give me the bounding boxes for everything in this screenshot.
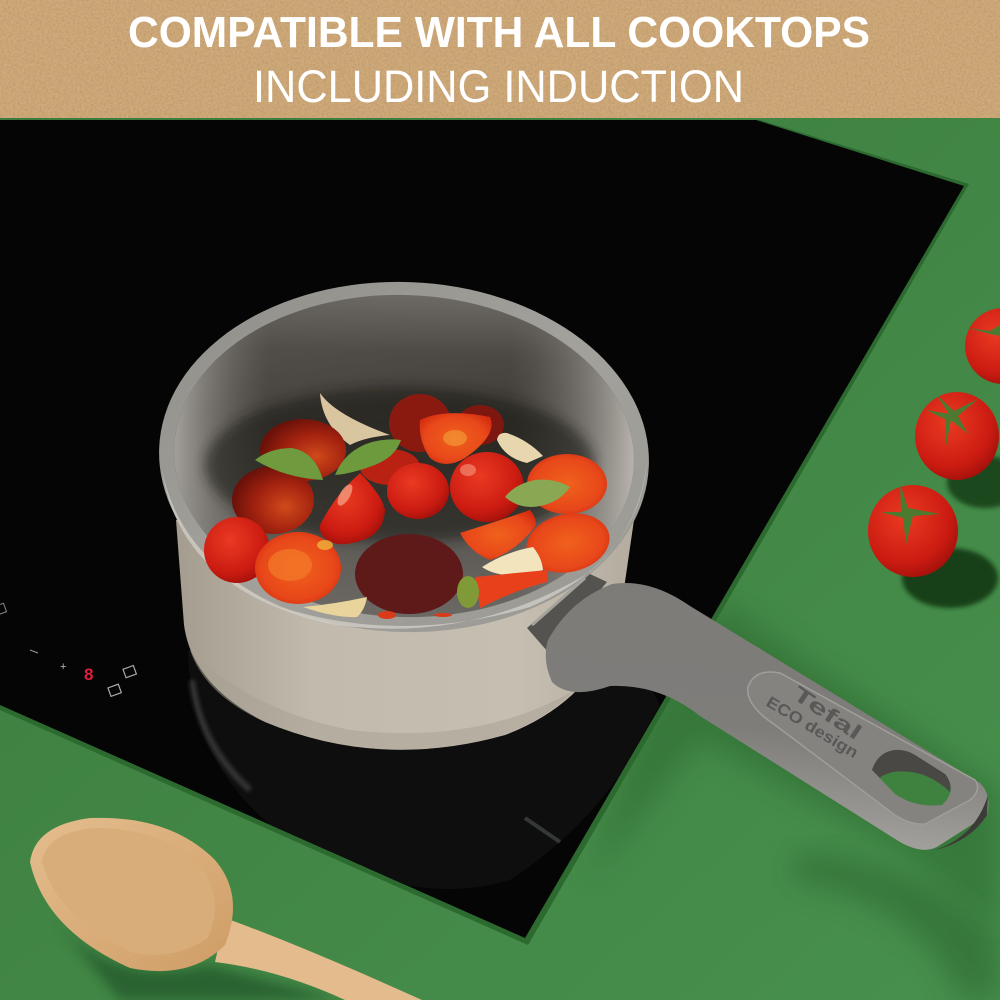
cooktop touch controls [0,603,136,696]
tomato shadows [902,548,998,608]
kraft paper banner [0,0,1000,118]
banner subheading: INCLUDING INDUCTION [253,61,744,112]
spoon bowl [30,818,233,971]
pan handle [527,574,988,851]
banner heading: COMPATIBLE WITH ALL COOKTOPS [128,8,870,57]
highlights [335,482,355,508]
induction cooktop [0,120,969,945]
wooden spoon [30,818,422,1000]
tomato middle [915,392,999,480]
handle grip [546,583,988,850]
handle hanging hole [872,750,951,806]
tomato bottom [868,485,958,577]
cooktop touch controls: 8 [84,665,93,684]
pan body [176,520,634,750]
spoon shadow [50,915,340,1000]
food: cherry tomatoes and basil [204,393,615,619]
tomato, rear halves [389,394,451,452]
heat indicator dot [355,534,463,614]
cooktop touch controls: + [60,661,66,673]
brand text: Eco design: ECO design [763,694,861,762]
shadow behind food [205,387,595,543]
cooktop pan reflection [188,650,660,889]
saucepan [153,274,655,750]
right-side tomatoes [868,308,1000,608]
logo plate [748,672,978,824]
metal collar [527,574,607,652]
spoon handle [215,918,422,1000]
basil leaves [255,448,323,480]
garlic rear [320,393,390,445]
curved shadow at bottom right of counter [790,850,1000,1000]
shadow of pan handle on countertop [590,600,1000,930]
brand text: Tefal: Tefal [788,682,866,745]
pan interior [169,287,639,625]
pan rim [153,274,655,640]
tomato top [965,308,1000,384]
